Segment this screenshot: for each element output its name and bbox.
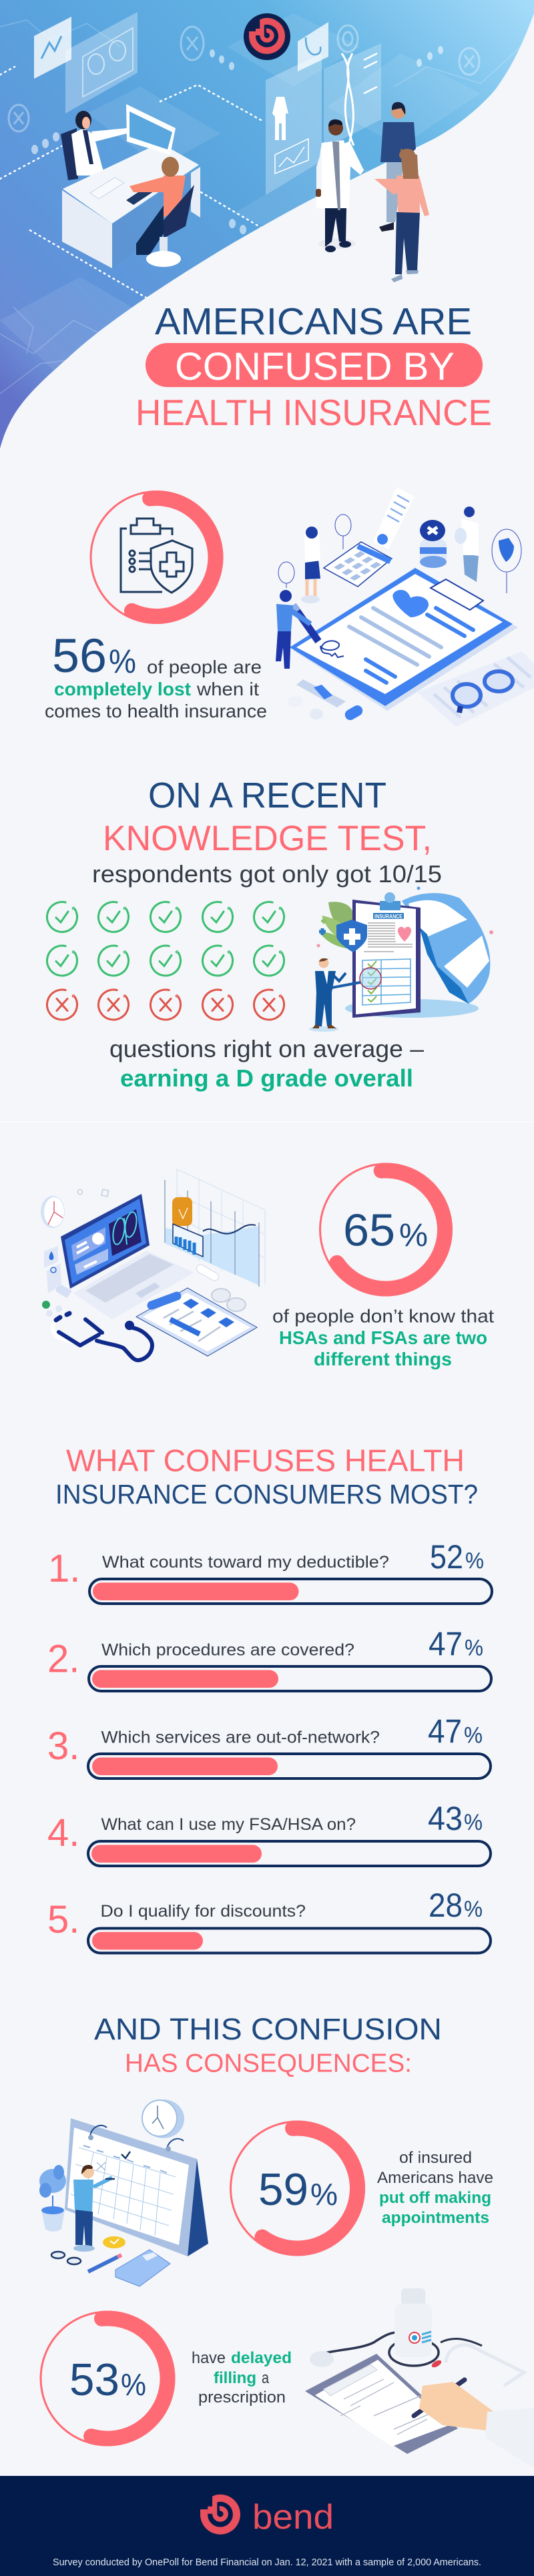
hero illustration: doctor and patient at desk [61, 104, 200, 268]
stat text: HSA and FSA: HSAs and FSAs are two [279, 1327, 487, 1348]
illustration: calendar with man [39, 2100, 208, 2286]
bar row 2: 47 [429, 1626, 463, 1663]
heading: what confuses consumers: INSURANCE CONSUMERS MOST? [55, 1479, 478, 1510]
stat ring: 65 percent: 65 [343, 1205, 395, 1256]
stat text: appointments: put off making [379, 2189, 491, 2207]
stat text: prescription: prescription [198, 2388, 286, 2406]
stat text: appointments: of insured [399, 2149, 472, 2167]
hero illustration: floating data panels [34, 12, 381, 195]
bar row 3: Which services are out-of-network? [101, 1728, 380, 1747]
stat ring: 65 percent: % [399, 1218, 428, 1253]
bar chart: confusing topics [47, 1538, 492, 1953]
bar row 3: % [464, 1723, 483, 1748]
stat text: HSA and FSA: of people don’t know that [272, 1305, 494, 1327]
bar row 2: % [465, 1635, 483, 1660]
bar row 4: 4. [47, 1811, 79, 1855]
stat text: appointments: appointments [382, 2209, 489, 2227]
stat ring: 59 percent: % [310, 2177, 338, 2212]
stat ring: 53 percent: % [121, 2367, 146, 2402]
bar row 2: Which procedures are covered? [101, 1640, 354, 1659]
illustration: prescription clipboard, bottle and stethoscope [305, 2288, 534, 2468]
bar row 5 [47, 1887, 491, 1953]
stat text: 56 percent: of people are [147, 657, 262, 677]
bar row 5: 5. [47, 1898, 79, 1941]
title: CONFUSED BY [175, 345, 455, 388]
icon: clipboard and shield [121, 519, 192, 593]
text: questions right on average [109, 1035, 424, 1092]
heading: knowledge test [92, 775, 442, 888]
stat ring: 65 percent [320, 1164, 451, 1295]
stat ring: 56 percent with clipboard icon [91, 491, 222, 623]
bar row 4 [47, 1800, 491, 1866]
heading: knowledge test: KNOWLEDGE TEST, [103, 819, 432, 858]
stat text: prescription: a [262, 2369, 270, 2387]
heading: what confuses consumers: WHAT CONFUSES HEALTH [66, 1443, 465, 1478]
heading: what confuses consumers [55, 1443, 478, 1510]
stat text: prescription: have [192, 2349, 226, 2367]
stat ring: 53 percent [41, 2312, 174, 2445]
stat text: prescription [192, 2349, 292, 2406]
bar row 3: 47 [428, 1712, 462, 1750]
title: AMERICANS ARE [155, 300, 472, 343]
bar row 3 [47, 1712, 491, 1779]
heading: consequences: HAS CONSEQUENCES: [125, 2049, 412, 2078]
bar row 5: % [464, 1897, 483, 1922]
bar row 4: 43 [428, 1800, 463, 1837]
stat text: prescription: delayed [231, 2349, 292, 2367]
stat ring: 59 percent: 59 [258, 2164, 308, 2215]
text: questions right on average: earning a D grade overall [120, 1064, 413, 1092]
bar row 5: 28 [429, 1887, 463, 1924]
stat text: appointments [377, 2149, 493, 2227]
heading: knowledge test: ON A RECENT [148, 775, 386, 816]
bar row 1: What counts toward my deductible? [102, 1553, 389, 1572]
hero: blue curved background [0, 0, 534, 467]
stat text: 56 percent: when it [196, 679, 259, 699]
illustration: insurance clipboard, umbrella and man: INSURANCE [374, 914, 403, 920]
bar row 1: % [465, 1548, 484, 1574]
bar row 1 [48, 1538, 492, 1604]
bar row 2 [47, 1626, 491, 1691]
hero illustration: doctor greeting a couple [316, 102, 429, 282]
stat text: HSA and FSA: different things [314, 1349, 452, 1369]
stat text: 56 percent: comes to health insurance [45, 701, 267, 721]
bar row 1: 1. [48, 1547, 80, 1590]
illustration: signing a health form [276, 487, 534, 727]
stat text: 56 percent: 56 [52, 630, 107, 683]
bar row 4: What can I use my FSA/HSA on? [101, 1815, 356, 1834]
heading: knowledge test: respondents got only got 10/15 [92, 860, 442, 888]
stat ring: 59 percent [231, 2122, 364, 2255]
stat text: 56 percent: completely lost [54, 679, 191, 699]
illustration: laptop with x-ray and chart [41, 1169, 265, 1360]
illustration: insurance clipboard, umbrella and man [309, 886, 493, 1032]
stat text: 56 percent [45, 630, 267, 721]
score grid: ten correct answers and five wrong answers [41, 896, 290, 1025]
title [136, 300, 492, 433]
text: questions right on average: questions right on average – [109, 1035, 424, 1062]
bar row 4: % [464, 1810, 483, 1835]
stat text: appointments: Americans have [377, 2169, 493, 2187]
bar row 5: Do I qualify for discounts? [100, 1902, 306, 1921]
logo: bend mark, top [244, 13, 290, 60]
title: HEALTH INSURANCE [136, 392, 492, 433]
stat ring: 53 percent: 53 [69, 2354, 119, 2405]
wordmark: bend [252, 2498, 334, 2537]
source note: Survey conducted by OnePoll for Bend Financial on Jan. 12, 2021 with a sample of 2,000 Americans. [53, 2557, 481, 2568]
stat text: HSA and FSA [272, 1305, 494, 1369]
bar row 1: 52 [430, 1538, 463, 1576]
bar row 3: 3. [47, 1724, 79, 1768]
bar row 2: 2. [47, 1638, 79, 1680]
heading: consequences [94, 2012, 442, 2078]
logo: bend mark, footer [204, 2496, 236, 2531]
stat text: 56 percent: % [109, 643, 136, 680]
heading: consequences: AND THIS CONFUSION [94, 2012, 442, 2046]
footer band [0, 2476, 534, 2576]
stat text: prescription: filling [214, 2369, 256, 2387]
